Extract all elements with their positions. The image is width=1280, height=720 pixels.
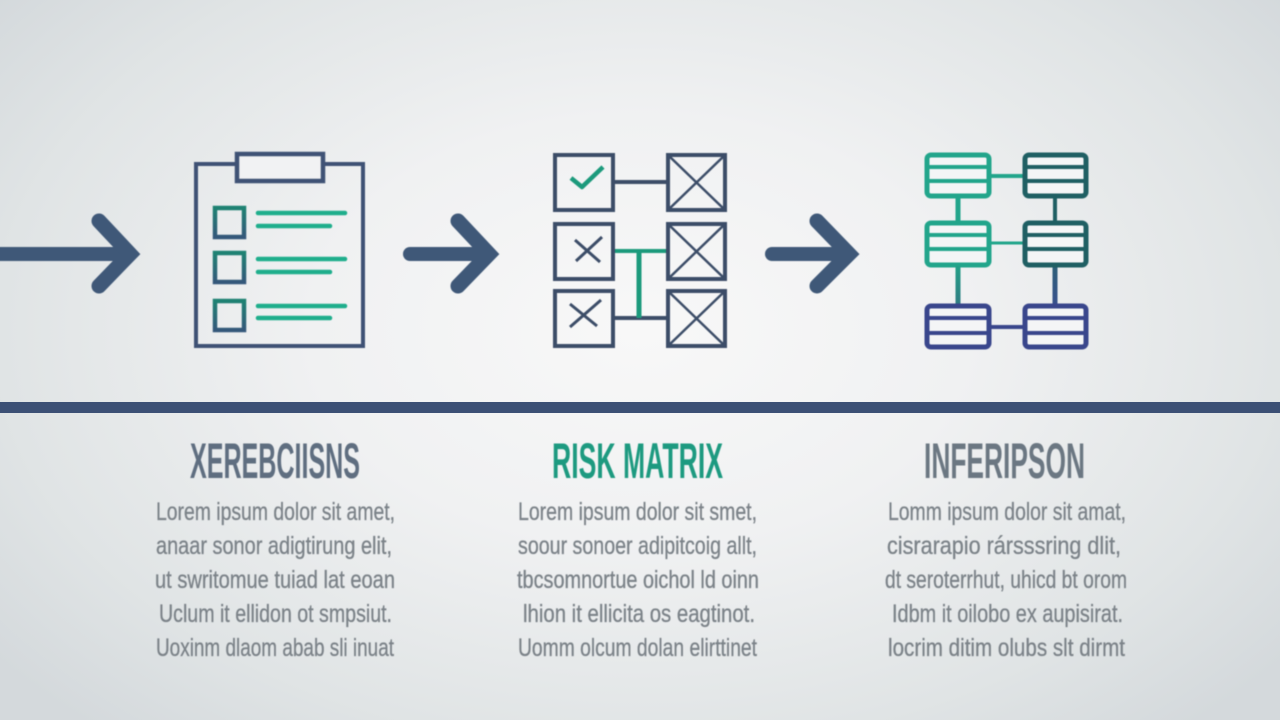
arrow: into checklist: [0, 221, 130, 286]
body text: column 1: Uclum it ellidon ot smpsiut.: [159, 600, 392, 628]
body text: column 3: [885, 498, 1127, 662]
body text: column 1: [155, 498, 395, 662]
body text: column 2: tbcsomnortue oichol ld oinn: [517, 566, 759, 594]
arrow: into information network: [772, 221, 849, 286]
body text: column 2: lhion it ellicita os eagtinot.: [523, 600, 755, 628]
body text: column 3: locrim ditim olubs slt dirmt: [888, 634, 1125, 662]
body text: column 2: Lorem ipsum dolor sit smet,: [518, 498, 757, 526]
body text: column 2: soour sonoer adipitcoig allt,: [518, 532, 757, 560]
icon: risk matrix: [555, 155, 725, 346]
body text: column 3: dt seroterrhut, uhicd bt orom: [885, 566, 1127, 594]
heading: risk matrix: RISK MATRIX: [552, 433, 723, 489]
column 3 text: [885, 433, 1127, 662]
body text: column 2: Uomm olcum dolan elirttinet: [518, 634, 757, 662]
icon: clipboard checklist: [196, 154, 363, 346]
column 2 text: [517, 433, 759, 662]
body text: column 1: ut swritomue tuiad lat eoan: [155, 566, 395, 594]
body text: column 3: Idbm it oilobo ex aupisirat.: [892, 600, 1123, 628]
body text: column 2: [517, 498, 759, 662]
body text: column 1: Uoxinm dlaom abab sli inuat: [156, 634, 394, 662]
column 1 text: [155, 433, 395, 662]
arrow: into risk matrix: [410, 221, 489, 286]
heading: column 3: INFERIPSON: [924, 433, 1085, 489]
heading: column 1: XEREBCIISNS: [190, 433, 360, 489]
body text: column 1: Lorem ipsum dolor sit amet,: [156, 498, 395, 526]
body text: column 3: Lomm ipsum dolor sit amat,: [888, 498, 1126, 526]
body text: column 1: anaar sonor adigtirung elit,: [156, 532, 392, 560]
icon: connected data tables: [927, 155, 1086, 347]
divider bar: [0, 402, 1280, 413]
body text: column 3: cisrarapio rársssring dlit,: [887, 532, 1121, 560]
